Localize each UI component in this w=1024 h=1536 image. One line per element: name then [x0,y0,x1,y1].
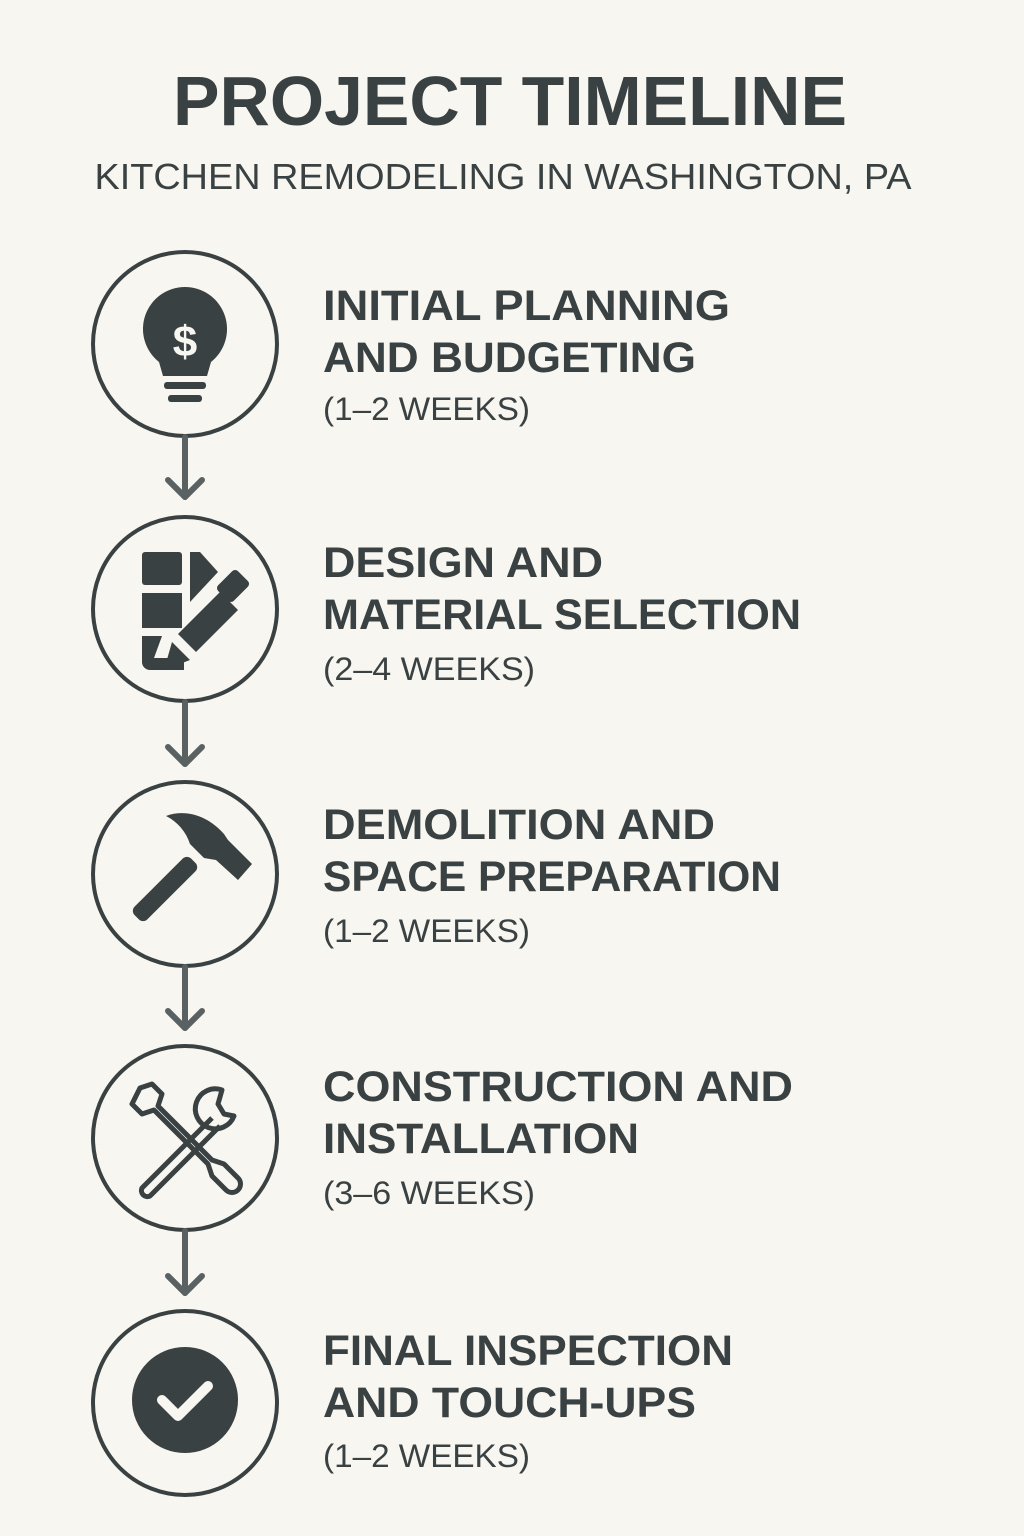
step 3: demolition: SPACE PREPARATION [323,853,781,901]
heading: DESIGN AND [323,539,603,587]
step 2: design [93,517,801,701]
step 5: final inspection [93,1311,733,1495]
icon: lightbulb with dollar: $ [173,318,197,367]
step 1: initial planning [93,252,730,436]
duration: (2–4 WEEKS) [323,651,535,687]
icon: lightbulb with dollar [93,252,277,436]
heading: CONSTRUCTION AND [323,1063,793,1111]
arrow 3 [168,967,202,1028]
duration: (1–2 WEEKS) [323,391,530,427]
icon: hammer [93,782,277,966]
duration: (1–2 WEEKS) [323,913,530,949]
step 2: design: MATERIAL SELECTION [323,591,801,639]
step 1: initial planning: AND BUDGETING [323,334,696,382]
heading: INITIAL PLANNING [323,282,730,330]
title: PROJECT TIMELINE [173,62,847,140]
step 3: demolition [93,782,781,966]
duration: (3–6 WEEKS) [323,1175,535,1211]
heading: FINAL INSPECTION [323,1327,733,1375]
heading: DEMOLITION AND [323,801,715,849]
arrow 2 [168,702,202,764]
arrow 1 [168,437,202,497]
icon: swatches and pencil [93,517,277,701]
subtitle: KITCHEN REMODELING IN WASHINGTON, PA [94,156,911,197]
step 4: construction [93,1046,793,1230]
duration: (1–2 WEEKS) [323,1438,530,1474]
step 4: construction: INSTALLATION [323,1115,639,1163]
step 5: final inspection: AND TOUCH-UPS [323,1379,696,1427]
icon: wrench and screwdriver [93,1046,277,1230]
arrow 4 [168,1231,202,1293]
icon: check circle [93,1311,277,1495]
